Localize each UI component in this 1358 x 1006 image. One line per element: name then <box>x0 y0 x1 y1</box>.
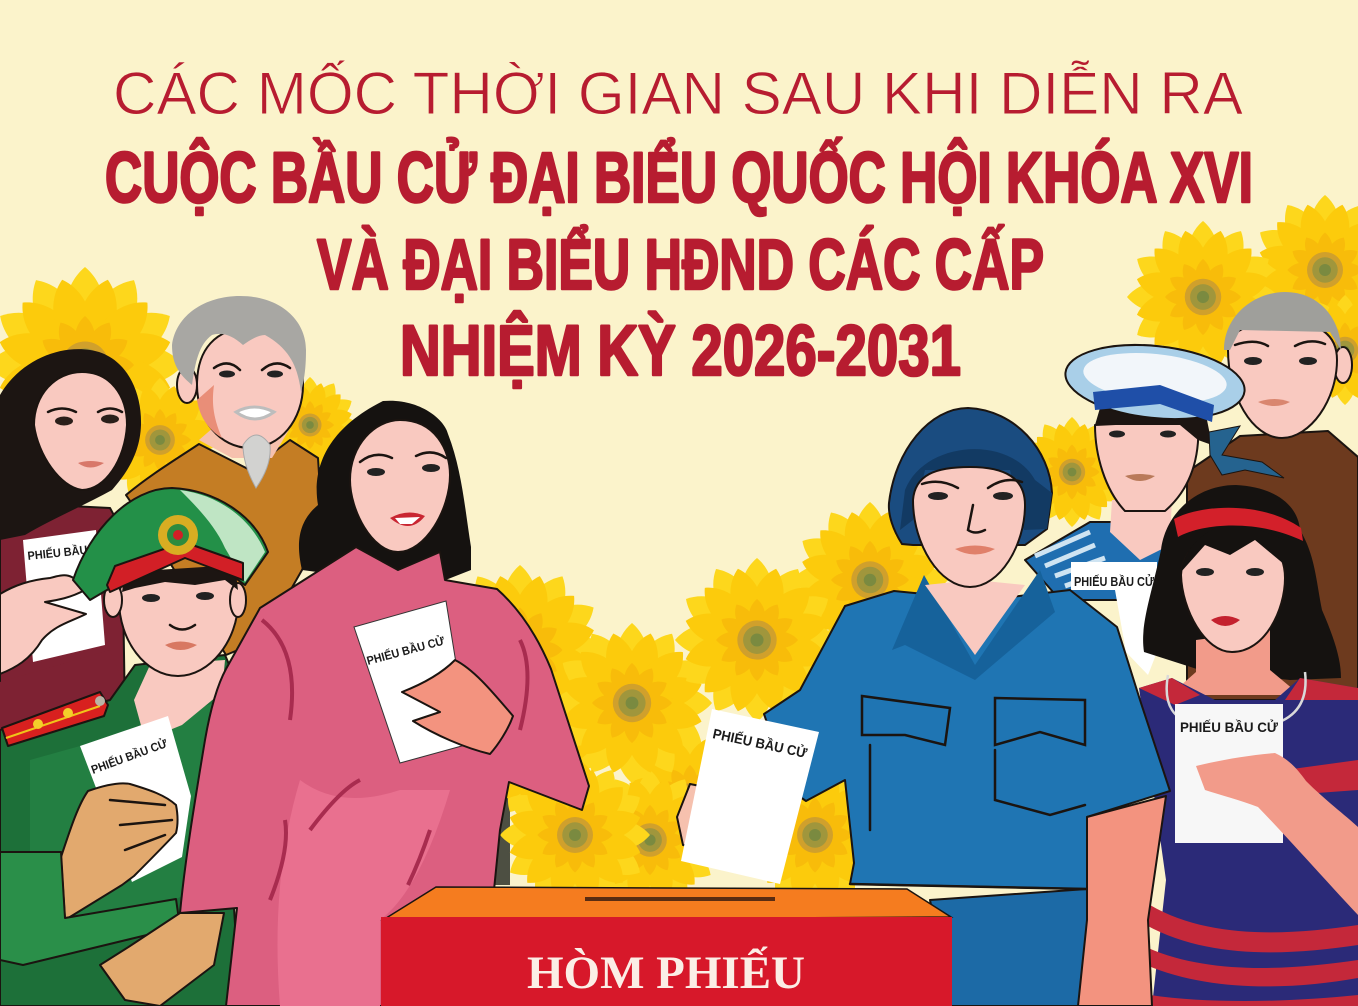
pockets <box>850 696 1087 889</box>
ballot <box>681 709 819 884</box>
face <box>350 420 450 552</box>
ochre tunic <box>126 440 322 655</box>
neck <box>134 660 225 740</box>
hand <box>402 660 513 754</box>
black hair <box>299 401 471 590</box>
box lid <box>383 887 951 920</box>
black hair <box>1143 485 1341 680</box>
character: woman in pink ao dai <box>180 401 589 1006</box>
title line 1: CÁC MỐC THỜI GIAN SAU KHI DIỄN RA <box>113 60 1243 127</box>
blue uniform <box>764 590 1170 889</box>
neck <box>1170 630 1300 695</box>
ballot <box>80 716 191 882</box>
lower hand <box>100 913 224 1006</box>
ballot: PHIẾU BẦU CỬ <box>1180 718 1278 735</box>
character: woman with red headband <box>1139 485 1358 1006</box>
green uniform <box>0 655 240 1006</box>
sailor cap <box>1062 337 1248 427</box>
blue ribbon <box>1209 426 1284 478</box>
character: police officer <box>0 488 268 1006</box>
ballot: PHIẾU BẦU <box>27 542 88 563</box>
sunflowers <box>0 187 1358 918</box>
ballot <box>1175 704 1283 843</box>
character: soldier in blue <box>677 408 1170 1006</box>
title line 3: VÀ ĐẠI BIỂU HĐND CÁC CẤP <box>317 225 1044 305</box>
grey hair <box>1224 292 1341 350</box>
navy dress <box>1139 678 1358 1006</box>
title line 4: NHIỆM KỲ 2026-2031 <box>400 311 961 391</box>
ballot: PHIẾU BẦU CỬ <box>89 735 169 777</box>
helmet <box>889 408 1052 545</box>
green cap <box>73 488 268 600</box>
striped collar <box>1025 522 1190 600</box>
character: monk <box>1187 292 1358 700</box>
arm <box>1196 753 1358 915</box>
box label: HÒM PHIẾU <box>527 946 805 999</box>
red headband <box>1174 508 1303 541</box>
necklace <box>1167 672 1306 725</box>
beard <box>243 435 270 488</box>
ballot: PHIẾU BẦU CỬ <box>365 633 446 668</box>
pants <box>930 889 1090 1006</box>
ballot <box>354 601 469 763</box>
ballot box <box>381 887 952 1006</box>
ballot: PHIẾU BẦU CỬ <box>1074 574 1154 589</box>
hand <box>677 784 720 850</box>
hand <box>0 575 86 674</box>
ballot <box>1071 562 1157 675</box>
face <box>1095 420 1198 511</box>
arm <box>1078 796 1166 1006</box>
grey hair <box>172 296 306 392</box>
epaulette <box>2 692 108 746</box>
character: sailor <box>1025 337 1284 675</box>
face <box>197 328 303 448</box>
sleeve <box>0 852 180 965</box>
collar <box>892 570 1055 680</box>
ballot: PHIẾU BẦU CỬ <box>711 724 809 761</box>
face <box>119 570 238 676</box>
character: old man <box>126 296 322 655</box>
title <box>105 60 1253 391</box>
box front <box>381 917 952 1006</box>
hand <box>61 783 178 920</box>
pink dress <box>180 547 589 1006</box>
ballot <box>23 530 105 662</box>
character: woman in maroon <box>0 349 141 730</box>
face <box>1181 530 1285 652</box>
face <box>913 467 1025 587</box>
ear <box>177 367 197 403</box>
